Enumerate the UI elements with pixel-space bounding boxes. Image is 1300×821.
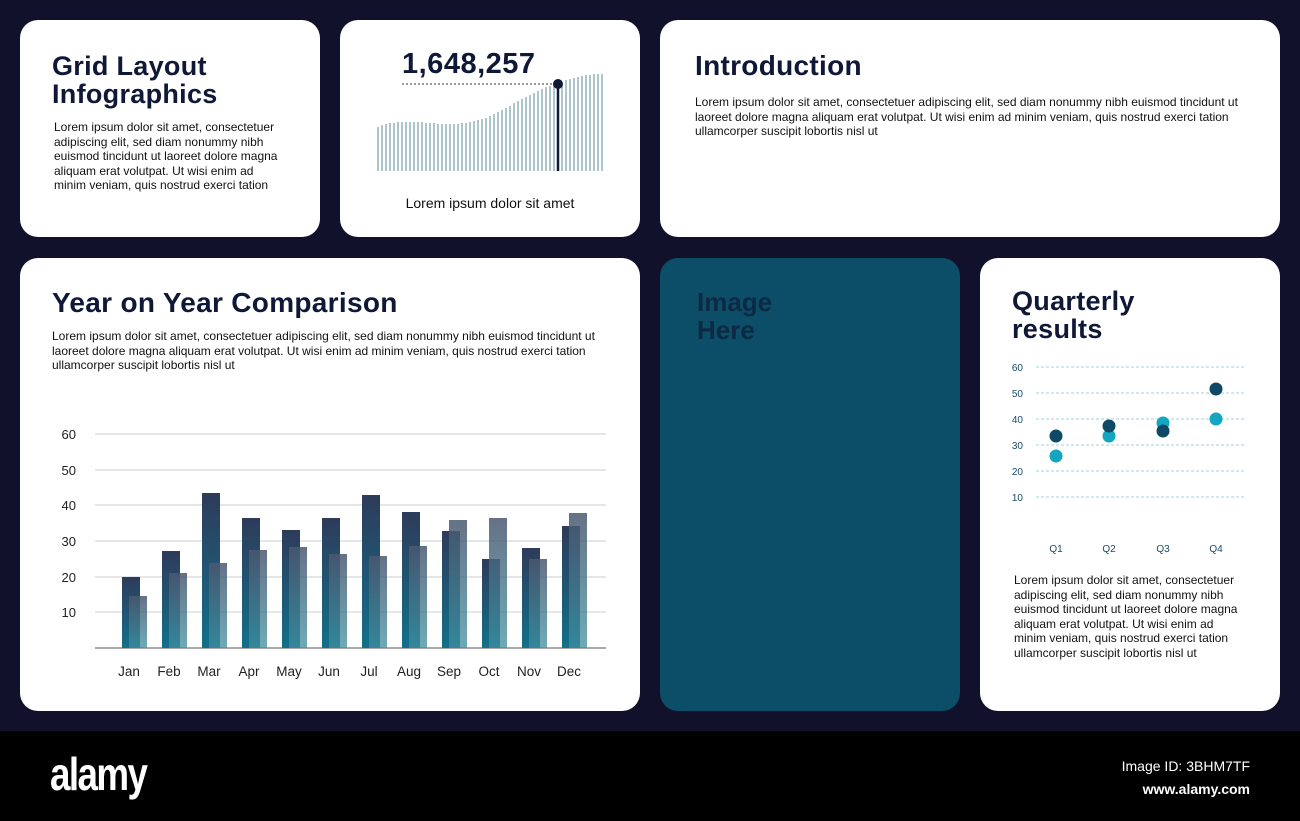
heading: Image Here: Here — [697, 315, 755, 345]
bar chart: Feb — [157, 664, 181, 679]
bar chart: May — [276, 664, 302, 679]
heading: Image Here: Image — [697, 287, 772, 317]
text block: introduction: Lorem ipsum dolor sit amet, consectetuer adipiscing elit, sed diam nonummy nibh euismod tincidunt ut laoreet dolore magna aliquam erat volutpat. Ut wisi enim ad minim veniam, quis nostrud exerci tation ullamcorper suscipit lobortis nisl ut — [695, 95, 1238, 138]
bar chart: 60 — [62, 427, 76, 442]
dot chart: Q1 — [1049, 544, 1063, 555]
bar chart: Aug — [397, 664, 421, 679]
bar chart: Apr — [238, 664, 260, 679]
text block: quarterly: Lorem ipsum dolor sit amet, consectetuer adipiscing elit, sed diam nonummy nibh euismod tincidunt ut laoreet dolore magna aliquam erat volutpat. Ut wisi enim ad minim veniam, quis nostrud exerci tation ullamcorper suscipit lobortis nisl ut — [1014, 573, 1237, 660]
bar chart: Mar — [197, 664, 221, 679]
heading: Introduction: Introduction — [695, 50, 862, 81]
dot chart — [1012, 363, 1244, 555]
stat number: 1,648,257 — [402, 48, 536, 80]
heading: Grid Layout Infographics — [52, 51, 218, 109]
bar chart: 20 — [62, 570, 76, 585]
chart: sparkline bars — [377, 74, 603, 171]
dot chart: 20 — [1012, 467, 1023, 478]
footer logo: alamy — [50, 748, 146, 800]
panel: grid layout title — [20, 20, 320, 237]
bar chart: Jul — [360, 664, 378, 679]
panel: quarterly results — [980, 258, 1280, 711]
text block: comparison: Lorem ipsum dolor sit amet, consectetuer adipiscing elit, sed diam nonummy nibh euismod tincidunt ut laoreet dolore magna aliquam erat volutpat. Ut wisi enim ad minim veniam, quis nostrud exerci tation ullamcorper suscipit lobortis nisl ut — [52, 329, 595, 372]
footer strip — [0, 731, 1300, 821]
bar chart — [62, 427, 606, 679]
bar chart: Nov — [517, 664, 541, 679]
dot chart: 50 — [1012, 389, 1023, 400]
dot chart: Q3 — [1156, 544, 1170, 555]
heading: Quarterly results — [1012, 286, 1135, 344]
dot chart: 40 — [1012, 415, 1023, 426]
heading: Image Here — [697, 287, 772, 345]
bar chart: 50 — [62, 463, 76, 478]
bar chart: Jan — [118, 664, 140, 679]
bar chart: Dec — [557, 664, 581, 679]
dot chart: 60 — [1012, 363, 1023, 374]
panel: introduction — [660, 20, 1280, 237]
bar chart: Jun — [318, 664, 340, 679]
panel: image placeholder — [660, 258, 960, 711]
bar chart: 10 — [62, 605, 76, 620]
text block: intro: Lorem ipsum dolor sit amet, consectetuer adipiscing elit, sed diam nonummy nibh euismod tincidunt ut laoreet dolore magna aliquam erat volutpat. Ut wisi enim ad minim veniam, quis nostrud exerci tation — [54, 120, 277, 192]
heading: Grid Layout Infographics: Infographics — [52, 79, 218, 109]
caption: Lorem ipsum dolor sit amet — [406, 195, 574, 211]
dot chart: Q2 — [1102, 544, 1116, 555]
dot chart: 10 — [1012, 493, 1023, 504]
heading: Quarterly results: Quarterly — [1012, 286, 1135, 316]
footer id text — [1122, 758, 1250, 797]
footer id text: www.alamy.com — [1143, 781, 1250, 797]
panel: big number — [340, 20, 640, 237]
bar chart: 40 — [62, 498, 76, 513]
bar chart: Oct — [478, 664, 500, 679]
footer id text: Image ID: 3BHM7TF — [1122, 758, 1250, 774]
heading: Grid Layout Infographics: Grid Layout — [52, 51, 207, 81]
bar chart: 30 — [62, 534, 76, 549]
panel: year on year comparison — [20, 258, 640, 711]
bar chart: Sep — [437, 664, 461, 679]
heading: Quarterly results: results — [1012, 314, 1103, 344]
dot chart: 30 — [1012, 441, 1023, 452]
heading: Year on Year Comparison: Year on Year Comparison — [52, 287, 398, 318]
dot chart: Q4 — [1209, 544, 1223, 555]
